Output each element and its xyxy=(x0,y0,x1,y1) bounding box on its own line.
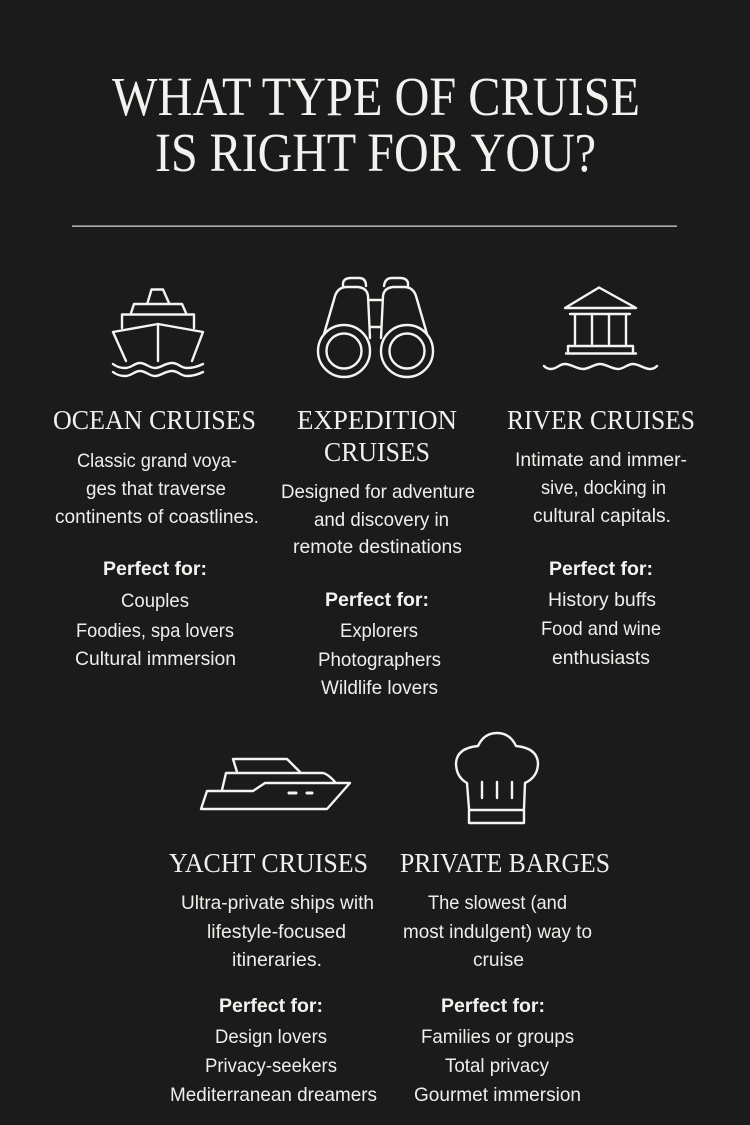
description: Designed for adventure xyxy=(281,481,475,503)
perfect for list: Design lovers xyxy=(215,1026,327,1048)
description: itineraries. xyxy=(232,949,322,971)
perfect for list: Total privacy xyxy=(445,1055,549,1077)
description xyxy=(403,892,592,971)
perfect for list: History buffs xyxy=(548,589,656,611)
perfect for list: Couples xyxy=(121,590,189,612)
description xyxy=(55,450,259,528)
perfect for list: Perfect for: xyxy=(549,558,653,580)
perfect for list: Cultural immersion xyxy=(75,648,236,670)
description: Classic grand voya- xyxy=(77,450,237,472)
panel: private barges xyxy=(400,733,610,1106)
icon: binoculars xyxy=(318,278,433,377)
perfect for list: Wildlife lovers xyxy=(321,677,438,699)
perfect for list xyxy=(541,558,661,669)
perfect for list: Food and wine xyxy=(541,618,661,640)
description xyxy=(181,892,374,971)
icon: chef hat xyxy=(456,733,538,823)
perfect for list xyxy=(318,589,441,699)
description: remote destinations xyxy=(293,536,462,558)
perfect for list xyxy=(75,558,236,670)
heading: RIVER CRUISES xyxy=(507,405,695,435)
heading: YACHT CRUISES xyxy=(169,848,368,878)
panel: ocean cruises xyxy=(53,290,259,670)
description: and discovery in xyxy=(314,509,449,531)
perfect for list: Perfect for: xyxy=(103,558,207,580)
perfect for list: Photographers xyxy=(318,649,441,671)
description: sive, docking in xyxy=(541,477,666,499)
heading: OCEAN CRUISES xyxy=(53,405,256,435)
icon: cruise ship xyxy=(113,290,203,376)
description xyxy=(515,449,687,527)
description: continents of coastlines. xyxy=(55,506,259,528)
perfect for list: Mediterranean dreamers xyxy=(170,1084,377,1106)
title: WHAT TYPE OF CRUISE xyxy=(112,66,640,127)
perfect for list: Perfect for: xyxy=(325,589,429,611)
perfect for list: Perfect for: xyxy=(219,995,323,1017)
description: ges that traverse xyxy=(86,478,226,500)
perfect for list: Explorers xyxy=(340,620,418,642)
title: IS RIGHT FOR YOU? xyxy=(155,122,596,183)
perfect for list: enthusiasts xyxy=(552,647,650,669)
heading: EXPEDITION xyxy=(297,405,457,435)
perfect for list: Perfect for: xyxy=(441,995,545,1017)
panel: yacht cruises xyxy=(169,759,377,1106)
description xyxy=(281,481,475,558)
heading: CRUISES xyxy=(324,437,430,467)
icon: temple on water xyxy=(544,288,657,369)
description: cultural capitals. xyxy=(533,505,671,527)
perfect for list: Foodies, spa lovers xyxy=(76,620,234,642)
description: cruise xyxy=(473,949,524,971)
title xyxy=(112,66,640,183)
description: most indulgent) way to xyxy=(403,921,592,943)
icon: yacht xyxy=(201,759,350,809)
description: lifestyle-focused xyxy=(207,921,346,943)
description: The slowest (and xyxy=(428,892,567,914)
perfect for list xyxy=(414,995,581,1106)
perfect for list: Gourmet immersion xyxy=(414,1084,581,1106)
panel: river cruises xyxy=(507,288,695,669)
panel: expedition cruises xyxy=(281,278,475,699)
heading xyxy=(297,405,457,467)
heading: PRIVATE BARGES xyxy=(400,848,610,878)
description: Ultra-private ships with xyxy=(181,892,374,914)
perfect for list xyxy=(170,995,377,1106)
perfect for list: Families or groups xyxy=(421,1026,574,1048)
description: Intimate and immer- xyxy=(515,449,687,471)
perfect for list: Privacy-seekers xyxy=(205,1055,337,1077)
